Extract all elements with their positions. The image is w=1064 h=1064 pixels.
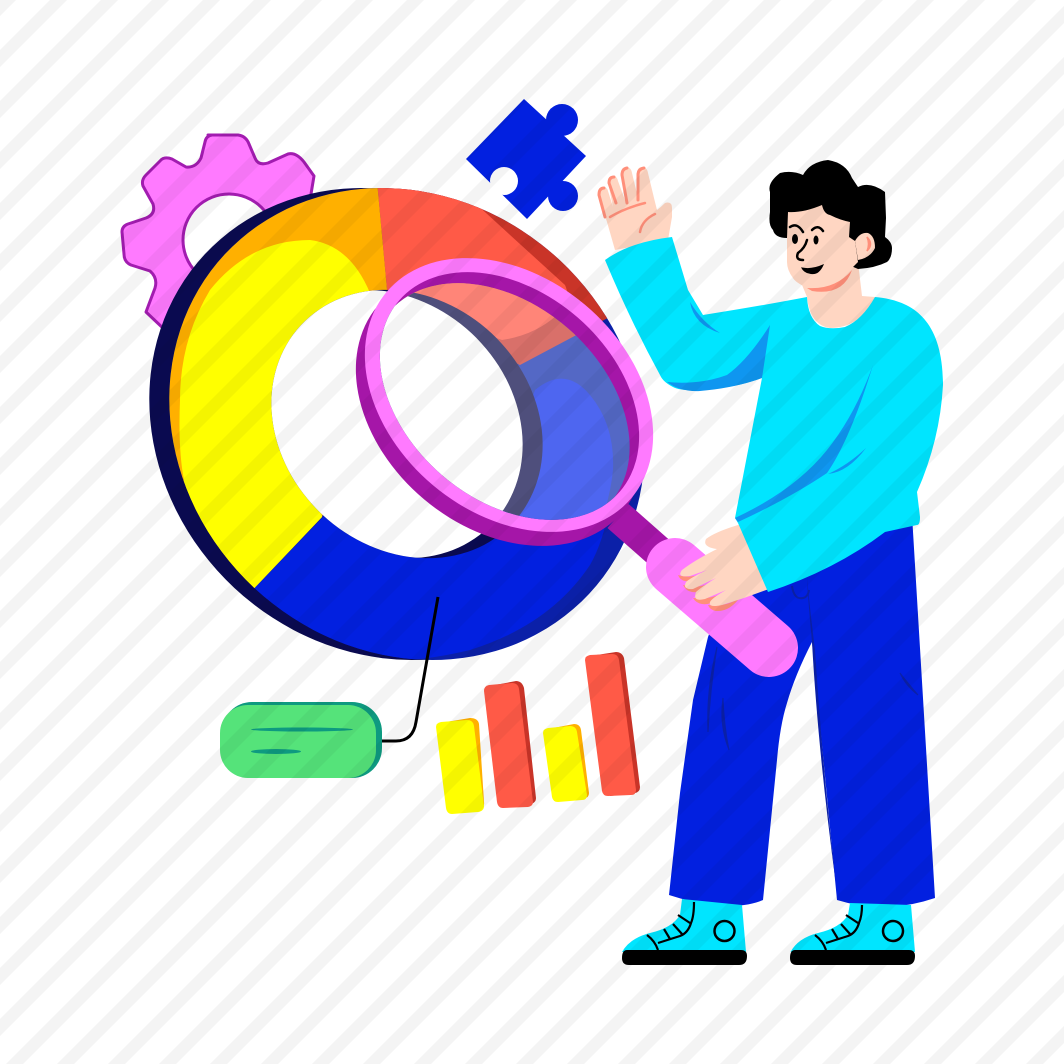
lens back rim — [302, 216, 698, 602]
bar 1 — [436, 718, 484, 814]
trousers — [669, 515, 935, 907]
donut chart — [149, 188, 642, 660]
sweater shadows — [667, 302, 873, 522]
magnifying glass — [356, 258, 654, 546]
sweater — [605, 237, 943, 592]
ear inner — [867, 237, 870, 251]
nose — [797, 240, 807, 260]
magnifier handle grip — [675, 567, 769, 648]
person — [598, 160, 943, 965]
segment: yellow — [180, 240, 369, 588]
glass tinted chart — [380, 283, 630, 520]
jaw shadow — [807, 270, 852, 292]
smile — [802, 265, 823, 274]
neck — [800, 262, 875, 328]
eyebrows — [790, 225, 823, 232]
left shoe — [622, 899, 747, 965]
donut hole inner wall — [216, 234, 598, 614]
icon: gear — [122, 135, 314, 340]
donut hole — [271, 290, 482, 558]
magnifier handle stem — [618, 516, 660, 553]
lens front rim — [311, 202, 707, 588]
segment: orange — [169, 188, 387, 588]
donut front face — [169, 188, 642, 660]
segment: red shade — [378, 188, 608, 321]
bar 3 — [543, 724, 589, 802]
callout connector — [380, 597, 438, 741]
right shoe — [790, 903, 915, 965]
raised hand — [598, 167, 672, 250]
hair back — [769, 160, 892, 269]
head — [769, 160, 892, 292]
segment: red — [378, 188, 567, 291]
lens inner bevel — [331, 222, 688, 570]
face — [787, 205, 858, 288]
bar chart — [436, 652, 640, 814]
segment: blue — [254, 516, 604, 660]
callout label — [220, 702, 382, 778]
bar 4 — [585, 652, 640, 796]
donut side depth — [52, 90, 722, 758]
ear — [855, 233, 875, 260]
bar 2 — [484, 681, 536, 808]
lower hand — [678, 520, 780, 611]
icon: puzzle piece — [466, 99, 586, 219]
eyes — [792, 234, 798, 244]
